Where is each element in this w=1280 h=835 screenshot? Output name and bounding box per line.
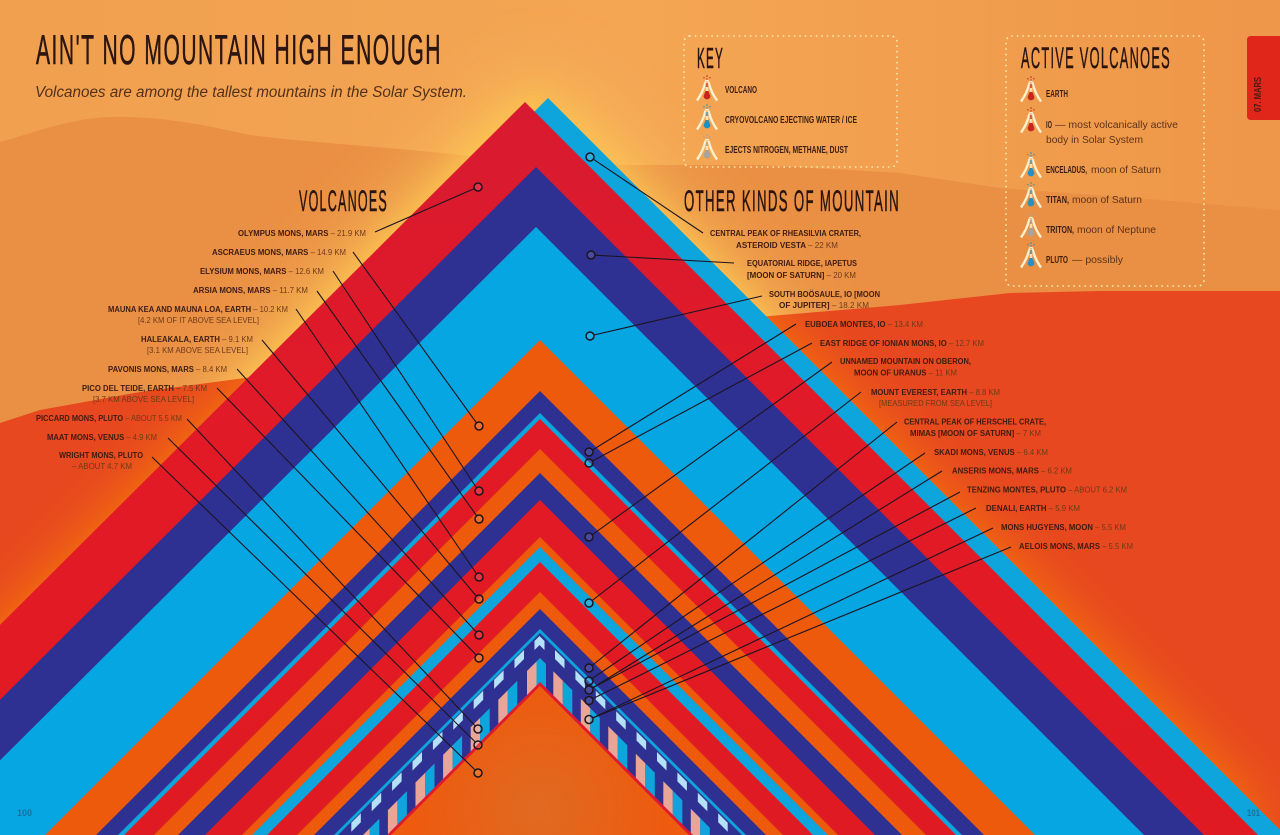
key item: volcano: VOLCANO: [725, 85, 757, 96]
label: Oberon mountain: UNNAMED MOUNTAIN ON OBERON,: [840, 357, 971, 366]
band: Euboea Montes: [96, 391, 984, 835]
label: Denali: DENALI, EARTH – 5.9 KM: [986, 504, 1080, 513]
item: Io: [1021, 107, 1178, 146]
label: East Ridge of Ionian Mons: EAST RIDGE OF IONIAN MONS, IO – 12.7 KM: [820, 339, 984, 348]
band: patterned strip: [338, 633, 742, 835]
title: AIN'T NO MOUNTAIN HIGH ENOUGH: [36, 26, 442, 73]
band: Oberon mountain: [178, 473, 902, 835]
key item: volcano: [697, 75, 757, 100]
label: Maat Mons: MAAT MONS, VENUS – 4.9 KM: [47, 433, 157, 442]
label: Mauna Kea and Mauna Loa: [4.2 KM OF IT ABOVE SEA LEVEL]: [138, 316, 259, 325]
label: Olympus Mons: OLYMPUS MONS, MARS – 21.9 KM: [238, 229, 366, 238]
band: Wright Mons outline: [387, 682, 693, 835]
label: Mount Everest: [MEASURED FROM SEA LEVEL]: [879, 399, 992, 408]
label: Piccard Mons: PICCARD MONS, PLUTO – ABOUT 5.5 KM: [36, 414, 182, 423]
label: Wright Mons: WRIGHT MONS, PLUTO: [59, 451, 143, 460]
label: Skadi Mons: SKADI MONS, VENUS – 6.4 KM: [934, 448, 1048, 457]
label: Elysium Mons: ELYSIUM MONS, MARS – 12.6 KM: [200, 267, 324, 276]
label: Mons Hugyens: [585, 523, 1126, 724]
label: Wright Mons: [59, 451, 482, 777]
panel: key: [684, 36, 897, 167]
item: Earth: EARTH: [1046, 89, 1068, 100]
item: Io: body in Solar System: [1046, 134, 1143, 146]
label: Aelois Mons: [593, 542, 1133, 718]
label: Herschel: CENTRAL PEAK OF HERSCHEL CRATE,: [904, 418, 1046, 426]
item: Triton: moon of Neptune: [1077, 224, 1156, 236]
label: Herschel: MIMAS [MOON OF SATURN] – 7 KM: [910, 429, 1041, 438]
label: Mauna Kea and Mauna Loa: [108, 305, 483, 581]
panel: active volcanoes: [1006, 36, 1204, 286]
label: Pico del Teide: PICO DEL TEIDE, EARTH – 7.5 KM: [82, 384, 207, 393]
item: Enceladus: ENCELADUS,: [1046, 165, 1087, 176]
label: Olympus Mons: [238, 183, 482, 238]
label: South Boosaule: [586, 290, 880, 340]
band: Haleakala: [242, 537, 838, 835]
label: Piccard Mons: [36, 414, 482, 733]
label: Skadi Mons: [585, 448, 1048, 685]
band: Pavonis Mons: [267, 562, 813, 835]
band: Elysium Mons: [124, 419, 956, 835]
item: Pluto: — possibly: [1072, 254, 1124, 266]
label: Oberon mountain: MOON OF URANUS – 11 KM: [854, 368, 957, 378]
item: Pluto: [1021, 242, 1124, 268]
panel: key: KEY: [697, 43, 724, 75]
label: Denali: [585, 504, 1080, 704]
text: VOLCANOES: [299, 185, 388, 218]
label: Elysium Mons: [200, 267, 483, 495]
label: Haleakala: [141, 335, 483, 603]
key item: nitrogen: [697, 134, 848, 160]
label: Herschel: [585, 418, 1046, 672]
section tab: 07. Mars: 07. MARS: [1253, 77, 1264, 112]
item: Titan: TITAN,: [1046, 195, 1069, 206]
key item: cryovolcano: CRYOVOLCANO EJECTING WATER / ICE: [725, 115, 857, 126]
item: Earth: [1021, 76, 1068, 102]
label: Pico del Teide: [3.7 KM ABOVE SEA LEVEL]: [93, 395, 194, 404]
label: Iapetus: [587, 251, 858, 280]
key item: cryovolcano: [697, 104, 857, 130]
key item: nitrogen: EJECTS NITROGEN, METHANE, DUST: [725, 145, 848, 156]
band: South Boosaule: [0, 227, 1144, 835]
page number: left: 100: [17, 808, 32, 818]
band: innermost peak: [391, 686, 689, 835]
item: Pluto: PLUTO: [1046, 255, 1068, 266]
label: Mons Hugyens: MONS HUGYENS, MOON – 5.5 KM: [1001, 523, 1126, 532]
label: Tenzing Montes: [592, 486, 1127, 688]
label: Aelois Mons: AELOIS MONS, MARS – 5.5 KM: [1019, 542, 1133, 551]
item: Io: — most volcanically active: [1055, 119, 1178, 131]
item: Triton: TRITON,: [1046, 225, 1074, 236]
band: East Ridge of Ionian Mons: [118, 413, 962, 835]
label: Iapetus: [MOON OF SATURN] – 20 KM: [747, 271, 856, 280]
label: Rheasilvia: [586, 153, 861, 250]
label: Maat Mons: [47, 433, 482, 749]
label: Arsia Mons: [193, 286, 483, 523]
item: Titan: [1021, 182, 1142, 208]
label: Haleakala: [3.1 KM ABOVE SEA LEVEL]: [147, 346, 248, 355]
label: South Boosaule: OF JUPITER] – 18.2 KM: [779, 301, 869, 310]
label: South Boosaule: SOUTH BOÖSAULE, IO [MOON: [769, 290, 880, 299]
label: Anseris Mons: ANSERIS MONS, MARS – 6.2 KM: [952, 466, 1072, 476]
label: Ascraeus Mons: ASCRAEUS MONS, MARS – 14.9 KM: [212, 248, 346, 257]
label: Pavonis Mons: PAVONIS MONS, MARS – 8.4 KM: [108, 365, 227, 374]
labels: volcanoes: [36, 183, 483, 777]
background: red foreground plain: [0, 291, 1280, 835]
label: East Ridge of Ionian Mons: [585, 339, 984, 467]
label: Mount Everest: MOUNT EVEREST, EARTH – 8.8 KM: [871, 388, 1000, 397]
label: Oberon mountain: [585, 357, 971, 541]
label: Mount Everest: [585, 388, 1000, 607]
label: Wright Mons: – ABOUT 4.7 KM: [72, 462, 132, 471]
text: OTHER KINDS OF MOUNTAIN: [684, 185, 900, 218]
label: Ascraeus Mons: [212, 248, 483, 430]
band: Iapetus ridge: [0, 167, 1204, 835]
label: Arsia Mons: ARSIA MONS, MARS – 11.7 KM: [193, 286, 308, 295]
label: Rheasilvia: ASTEROID VESTA – 22 KM: [736, 241, 838, 250]
label: Tenzing Montes: TENZING MONTES, PLUTO – ABOUT 6.2 KM: [967, 486, 1127, 494]
band: Herschel peak: [314, 609, 766, 835]
band: Skadi Mons: [334, 629, 746, 835]
label: Anseris Mons: [585, 466, 1072, 694]
item: Triton: [1021, 212, 1156, 238]
label: Rheasilvia: CENTRAL PEAK OF RHEASILVIA CRATER,: [710, 229, 861, 238]
label: Pico del Teide: [82, 384, 483, 662]
label: Iapetus: EQUATORIAL RIDGE, IAPETUS: [747, 259, 858, 268]
band: Ascraeus Mons: [45, 340, 1035, 835]
item: Io: IO: [1046, 120, 1052, 131]
band: Pico del Teide: [297, 592, 783, 835]
section tab: 07. Mars: [1247, 36, 1280, 120]
subtitle: Volcanoes are among the tallest mountains in the Solar System.: [35, 84, 467, 101]
item: Enceladus: [1021, 152, 1161, 178]
label: Haleakala: HALEAKALA, EARTH – 9.1 KM: [141, 335, 253, 344]
labels: other kinds of mountain: [585, 153, 1133, 724]
item: Titan: moon of Saturn: [1072, 194, 1142, 206]
band: Mauna Kea: [205, 500, 875, 835]
label: Mauna Kea and Mauna Loa: MAUNA KEA AND MAUNA LOA, EARTH – 10.2 KM: [108, 305, 288, 314]
band: Mount Everest: [252, 547, 828, 835]
page number: right: 101: [1247, 808, 1260, 818]
label: Euboea Montes: EUBOEA MONTES, IO – 13.4 KM: [805, 320, 923, 329]
label: Euboea Montes: [585, 320, 923, 456]
item: Enceladus: moon of Saturn: [1091, 164, 1161, 176]
label: Pavonis Mons: [108, 365, 483, 639]
band: Arsia Mons: [154, 449, 926, 835]
